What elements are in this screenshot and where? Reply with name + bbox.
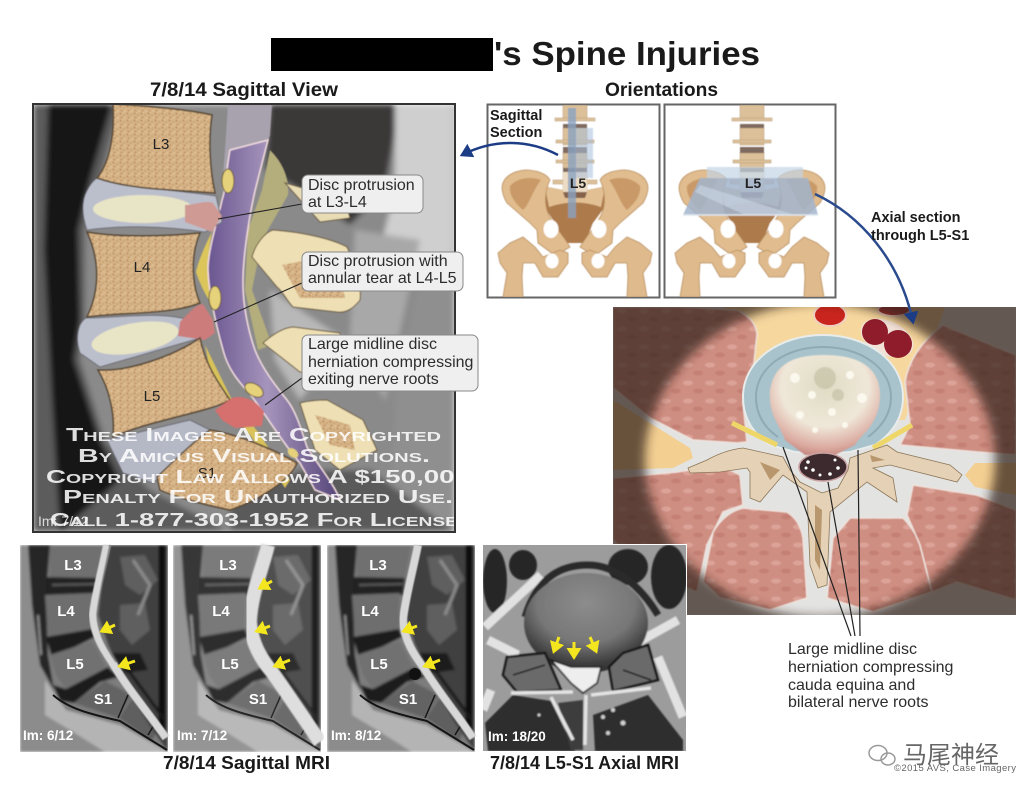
disc L3-L4 [83, 178, 222, 232]
copyright watermark: These Images Are Copyrighted [66, 424, 441, 445]
copyright watermark: Call 1-877-303-1952 For License [50, 509, 458, 530]
redacted name bar [271, 38, 493, 71]
MRI panel: sagittal image 8: L4 [361, 603, 379, 620]
MRI panel: sagittal image 6: L4 [57, 603, 75, 620]
callout: L5-S1 herniation: exiting nerve roots [308, 371, 439, 388]
paraspinal left [703, 508, 807, 610]
quadratus right [907, 485, 1016, 600]
caption: axial MRI: 7/8/14 L5-S1 Axial MRI [490, 753, 679, 773]
MRI panel: sagittal image 6: L5 [66, 656, 84, 673]
dark fat pockets [483, 545, 687, 613]
callout: L5-S1 herniation: Large midline disc [308, 336, 437, 353]
posterior elements [688, 445, 962, 588]
heading: orientations: Orientations [605, 79, 718, 101]
MRI panel: sagittal image 8 [327, 545, 475, 752]
vertebral disc [524, 573, 648, 673]
paraspinal right [827, 518, 932, 612]
callout: L3-L4 [302, 175, 423, 213]
heading: sagittal view: 7/8/14 Sagittal View [150, 79, 339, 101]
pointer lines: cauda equina callout [783, 447, 860, 636]
bright fat [483, 575, 683, 717]
image credit: ©2015 AVS, Case Imagery [894, 763, 1016, 774]
image number: Im: 7/12 [38, 513, 89, 529]
callout: L4-L5: annular tear at L4-L5 [308, 270, 457, 287]
herniation L5-S1 [215, 397, 264, 428]
MRI panel: sagittal image 6 [20, 545, 168, 752]
MRI panel: sagittal image 7 [173, 545, 321, 752]
sagittal section label: Sagittal [490, 108, 542, 124]
canal [551, 660, 601, 693]
MRI panel: sagittal image 8: L3 [369, 557, 387, 574]
quadratus left [613, 465, 743, 592]
account name: 马尾神经 [903, 742, 999, 769]
posterior muscles [485, 695, 575, 751]
callout: L3-L4: Disc protrusion [308, 177, 415, 194]
callout text: cauda equina: cauda equina and [788, 677, 915, 694]
olive ligament [245, 150, 288, 350]
callout: L5-S1 herniation: herniation compressing [308, 354, 473, 371]
MRI panel: sagittal image 8: L5 [370, 656, 388, 673]
title [271, 35, 760, 72]
axial section label [871, 210, 969, 244]
callout text: cauda equina: Large midline disc [788, 641, 917, 658]
label L3: L3 [153, 136, 169, 153]
MRI panel: sagittal image 8: Im: 8/12 [331, 728, 381, 743]
label L5: L5 [144, 388, 160, 405]
copyright watermark [47, 428, 454, 526]
thecal sac purple [208, 140, 340, 500]
vertebra S1 [157, 430, 297, 510]
callout: L4-L5 [302, 252, 463, 291]
MRI panel: sagittal image 8: S1 [399, 691, 417, 708]
vertebra L5 [98, 338, 230, 437]
callout: L5-S1 herniation [302, 335, 478, 391]
vignette around spotlight [603, 297, 1026, 625]
CSF column [250, 545, 320, 742]
axial plane [683, 167, 818, 215]
callout: L3-L4: at L3-L4 [308, 194, 367, 211]
MRI panel: sagittal image 6: Im: 6/12 [23, 728, 73, 743]
L5 label: L5 [570, 175, 586, 191]
MRI background [33, 104, 455, 532]
upper gray thecal sac [222, 104, 272, 190]
arrow: axial section to axial view [815, 194, 913, 322]
MRI panel: sagittal image 7: Im: 7/12 [177, 728, 227, 743]
sagittal plane [568, 108, 593, 218]
title text: 's Spine Injuries [494, 35, 760, 72]
MRI panel: sagittal image 7: L3 [219, 557, 237, 574]
panel: orientation, axial section [664, 104, 836, 298]
panel: orientation, sagittal section [488, 104, 660, 298]
disc L4-L5 [78, 315, 207, 367]
facet blocks [503, 653, 561, 692]
retroperitoneal fat [725, 307, 945, 420]
sagittal section label: Section [490, 125, 542, 141]
nerve root ovals [222, 169, 234, 193]
disc nucleus and herniation [770, 355, 880, 455]
MRI panel: sagittal image 6: S1 [94, 691, 112, 708]
spinous processes [252, 230, 360, 312]
arrow: sagittal section to main view [462, 143, 558, 155]
vertebra L4 [87, 232, 200, 317]
panel: main sagittal illustration [33, 104, 478, 532]
copyright watermark: Penalty For Unauthorized Use. [63, 486, 453, 507]
callout: L4-L5: Disc protrusion with [308, 253, 448, 270]
caption: sagittal MRI: 7/8/14 Sagittal MRI [163, 753, 330, 773]
vertebra L3 [97, 104, 215, 193]
callout text: cauda equina: herniation compressing [788, 659, 953, 676]
label S1: S1 [198, 465, 216, 482]
spine and pelvis [498, 105, 652, 297]
base layer [613, 307, 1016, 615]
psoas muscle right [900, 325, 1016, 455]
panel: axial section illustration [613, 307, 1016, 615]
copyright watermark: Copyright Law Allows A $150,000 [46, 466, 470, 487]
ring around disc [525, 565, 658, 617]
CSF column [403, 545, 473, 738]
MRI panel: sagittal image 7: S1 [249, 691, 267, 708]
MRI panel: sagittal image 7: L5 [221, 656, 239, 673]
MRI panel: axial image: Im: 18/20 [488, 729, 546, 744]
spine and pelvis [675, 105, 829, 297]
MRI panel: axial image [482, 544, 687, 752]
icon: chat bubbles [869, 746, 895, 765]
vessels [813, 307, 914, 358]
MRI panel: sagittal image 7: L4 [212, 603, 230, 620]
fat pads [613, 400, 693, 470]
axial section label: Axial section [871, 210, 960, 226]
axial section label: through L5-S1 [871, 228, 969, 244]
CSF column [93, 545, 166, 738]
disc annulus [743, 335, 903, 454]
label L4: L4 [134, 259, 150, 276]
pointer lines [214, 204, 302, 405]
MRI panel: sagittal image 6: L3 [64, 557, 82, 574]
psoas muscle left [613, 307, 757, 443]
spinal canal [799, 453, 847, 481]
yellow nerve roots [732, 423, 912, 448]
copyright watermark: By Amicus Visual Solutions. [78, 445, 430, 466]
sagittal section label [490, 108, 542, 141]
disc L5-S1 [107, 420, 210, 483]
callout text: cauda equina: bilateral nerve roots [788, 694, 929, 711]
L5 label: L5 [745, 175, 761, 191]
